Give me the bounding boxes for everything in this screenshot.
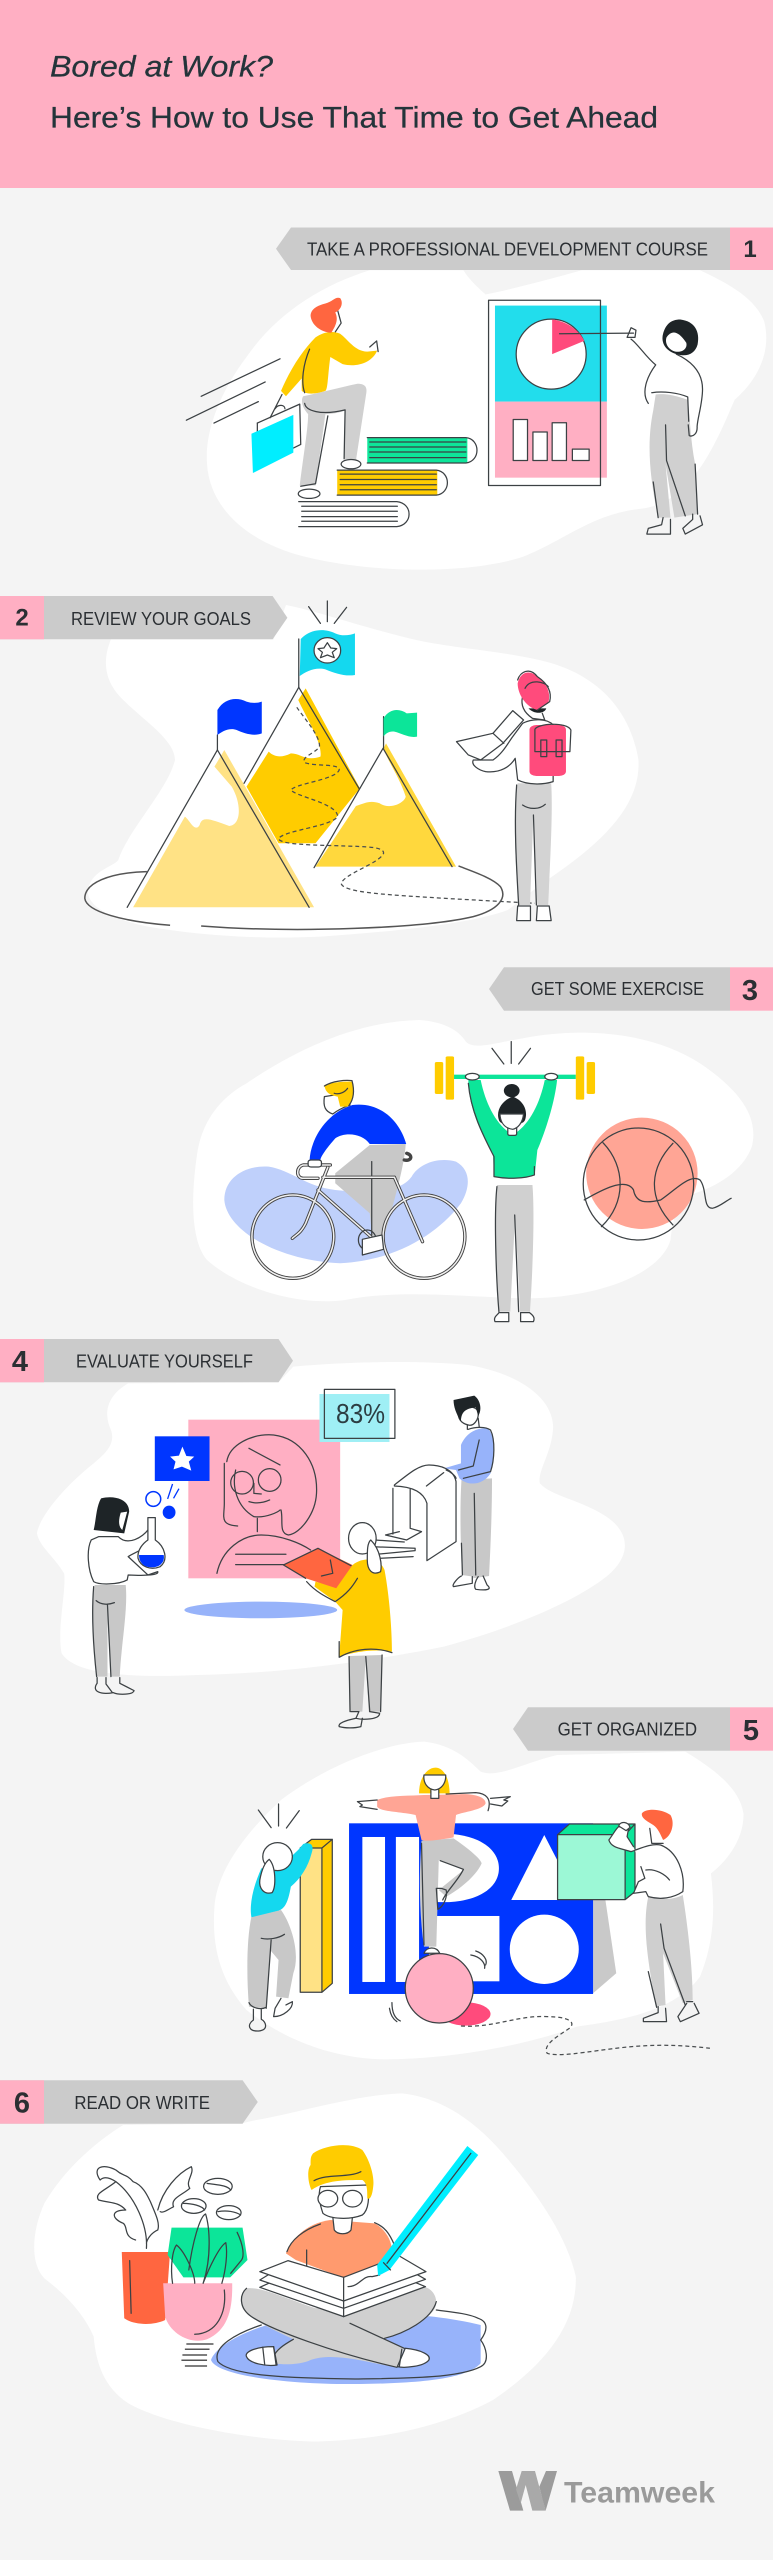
floor shadow — [184, 1602, 337, 1618]
dashed trail — [279, 707, 535, 903]
banner 4 text: EVALUATE YOURSELF — [76, 1351, 253, 1372]
orange folder — [283, 1548, 352, 1588]
rays — [309, 601, 347, 623]
green box — [558, 1824, 635, 1900]
panel: illustration 4, evaluate yourself — [37, 1362, 625, 1728]
climbing person — [281, 298, 378, 498]
banner 4 — [0, 1339, 293, 1382]
banner 1 text: TAKE A PROFESSIONAL DEVELOPMENT COURSE — [307, 239, 708, 260]
background blob 1 — [207, 270, 766, 570]
banner 6 text: READ OR WRITE — [74, 2092, 210, 2113]
mountains — [127, 687, 456, 907]
panel: illustration 2, review your goals — [85, 601, 639, 938]
portrait board — [188, 1420, 340, 1578]
banner 1 — [276, 228, 773, 270]
hiker with backpack — [457, 671, 571, 921]
score text: 83% — [336, 1398, 385, 1429]
plants — [97, 2167, 247, 2366]
logo wordmark: Teamweek — [564, 2477, 715, 2510]
title: question: Bored at Work? — [50, 51, 273, 84]
bubbles — [146, 1484, 179, 1519]
background blob 2 — [88, 605, 639, 938]
title: main heading: Here’s How to Use That Time to Get Ahead — [50, 102, 658, 134]
blue shadow blob — [224, 1160, 468, 1263]
rays — [492, 1042, 530, 1064]
yellow column — [300, 1839, 332, 1992]
shopping bag — [251, 394, 301, 473]
number 4: 4 — [12, 1346, 28, 1378]
background blob 6 — [34, 2093, 576, 2442]
ball — [583, 1118, 731, 1240]
person pushing column — [247, 1843, 313, 2031]
red pot — [122, 2252, 170, 2324]
rays left — [258, 1804, 299, 1828]
book stack — [299, 438, 477, 527]
background blob 3 — [193, 1020, 753, 1301]
number 6: 6 — [14, 2088, 30, 2120]
banner 6 — [0, 2080, 258, 2124]
bar chart — [513, 419, 589, 461]
star badge — [155, 1436, 210, 1481]
presentation board — [489, 300, 634, 486]
ground ellipse — [85, 866, 503, 929]
panel: illustration 6, read or write — [34, 2093, 576, 2442]
background blob 5 — [214, 1742, 743, 2059]
banner 5 — [513, 1707, 773, 1751]
banner 3 text: GET SOME EXERCISE — [531, 978, 704, 999]
number 2: 2 — [15, 604, 29, 632]
banner 2 text: REVIEW YOUR GOALS — [71, 608, 251, 629]
pointing woman — [627, 320, 703, 534]
number 5: 5 — [743, 1715, 759, 1747]
panel: illustration 1, professional development course — [186, 270, 766, 570]
barbell lifter — [435, 1056, 595, 1322]
reader with yellow coat — [283, 1523, 392, 1728]
panel: illustration 3, get some exercise — [193, 1020, 753, 1322]
balance ball — [389, 1951, 491, 2026]
score card — [319, 1389, 395, 1442]
cyclist — [252, 1080, 465, 1278]
dashed trail 5 — [461, 2016, 710, 2055]
logo mark — [498, 2471, 557, 2511]
pie chart — [516, 319, 586, 389]
man at printer — [371, 1396, 494, 1590]
flask — [138, 1518, 165, 1568]
background blob 4 — [37, 1362, 625, 1676]
banner 3 — [489, 967, 773, 1011]
flag: blue — [217, 699, 262, 750]
big pencil — [377, 2146, 478, 2276]
header panel — [0, 0, 773, 188]
flag: cyan star — [299, 630, 355, 687]
open book — [260, 2256, 426, 2317]
scientist with flask — [88, 1497, 165, 1694]
flag: green — [384, 710, 417, 748]
logo: Teamweek — [498, 2471, 715, 2511]
person with box — [609, 1810, 699, 2022]
banner 5 text: GET ORGANIZED — [558, 1718, 697, 1739]
blue cushion — [211, 2310, 486, 2384]
balancing woman — [357, 1768, 510, 1953]
number 3: 3 — [742, 975, 758, 1007]
reader — [241, 2145, 436, 2367]
panel: illustration 5, get organized — [214, 1742, 743, 2059]
speed lines — [186, 359, 280, 423]
shapes board — [349, 1823, 616, 1994]
bicycle — [252, 1153, 465, 1278]
banner 2 — [0, 596, 287, 639]
printout — [371, 1465, 456, 1561]
number 1: 1 — [743, 236, 757, 263]
